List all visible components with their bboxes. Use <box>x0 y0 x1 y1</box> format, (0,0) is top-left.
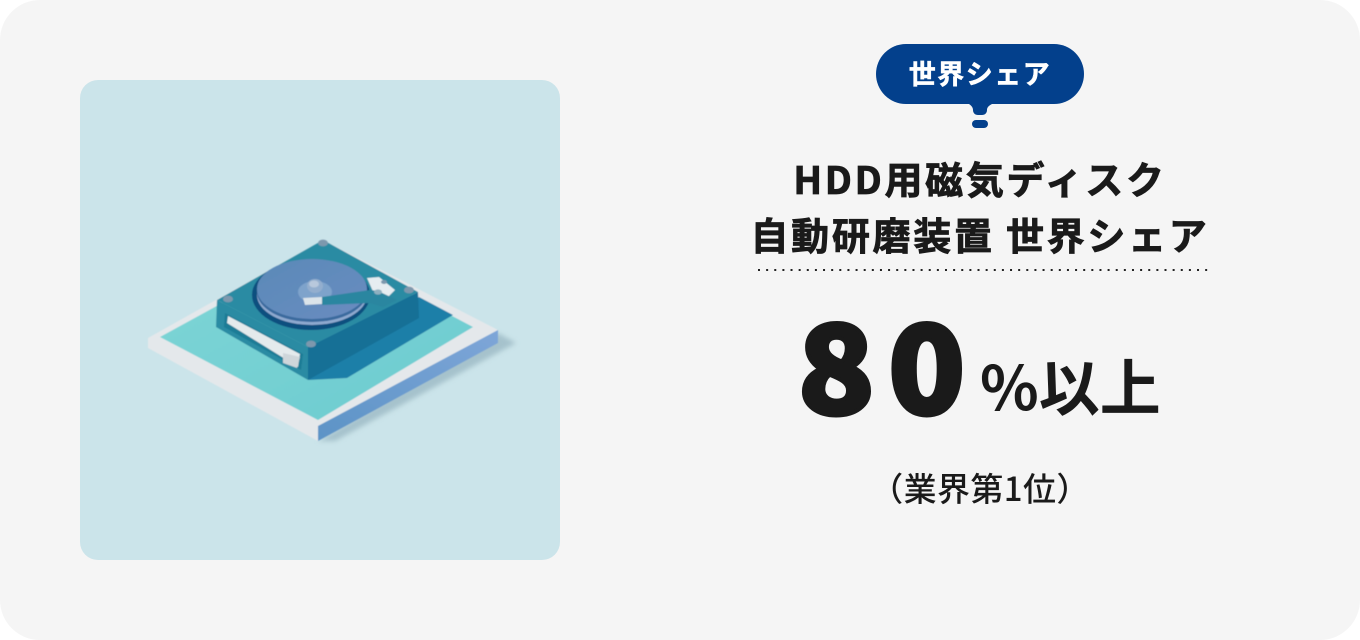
platform base and border <box>148 240 498 441</box>
hard disk left side <box>216 300 308 380</box>
platform teal surface <box>160 248 473 420</box>
screws <box>318 240 328 246</box>
spindle <box>298 281 332 303</box>
badge: speech bubble <box>876 44 1084 128</box>
hard disk right side <box>308 292 419 380</box>
platform right side <box>318 330 498 441</box>
actuator arm <box>367 277 395 298</box>
big figure: 80% or more <box>798 275 1161 449</box>
heading: HDD用磁気ディスク <box>793 150 1167 205</box>
disk well <box>252 260 370 330</box>
disk platter <box>257 265 367 325</box>
platform shadow <box>318 333 516 441</box>
hard disk top <box>217 240 418 347</box>
number 80: 80 <box>798 275 979 449</box>
heading: 自動研磨装置 世界シェア <box>750 206 1210 261</box>
unit: %以上 <box>980 339 1161 428</box>
badge label: 世界シェア <box>909 53 1051 92</box>
connector recess <box>224 313 303 370</box>
connector slot <box>227 316 300 367</box>
hard disk shadow <box>308 297 453 380</box>
heading <box>750 150 1210 261</box>
note: industry rank: （業界第1位） <box>870 463 1090 511</box>
panel: illustration <box>80 80 560 560</box>
illustration: hard disk on platform <box>148 240 516 441</box>
dotted divider <box>758 269 1208 271</box>
